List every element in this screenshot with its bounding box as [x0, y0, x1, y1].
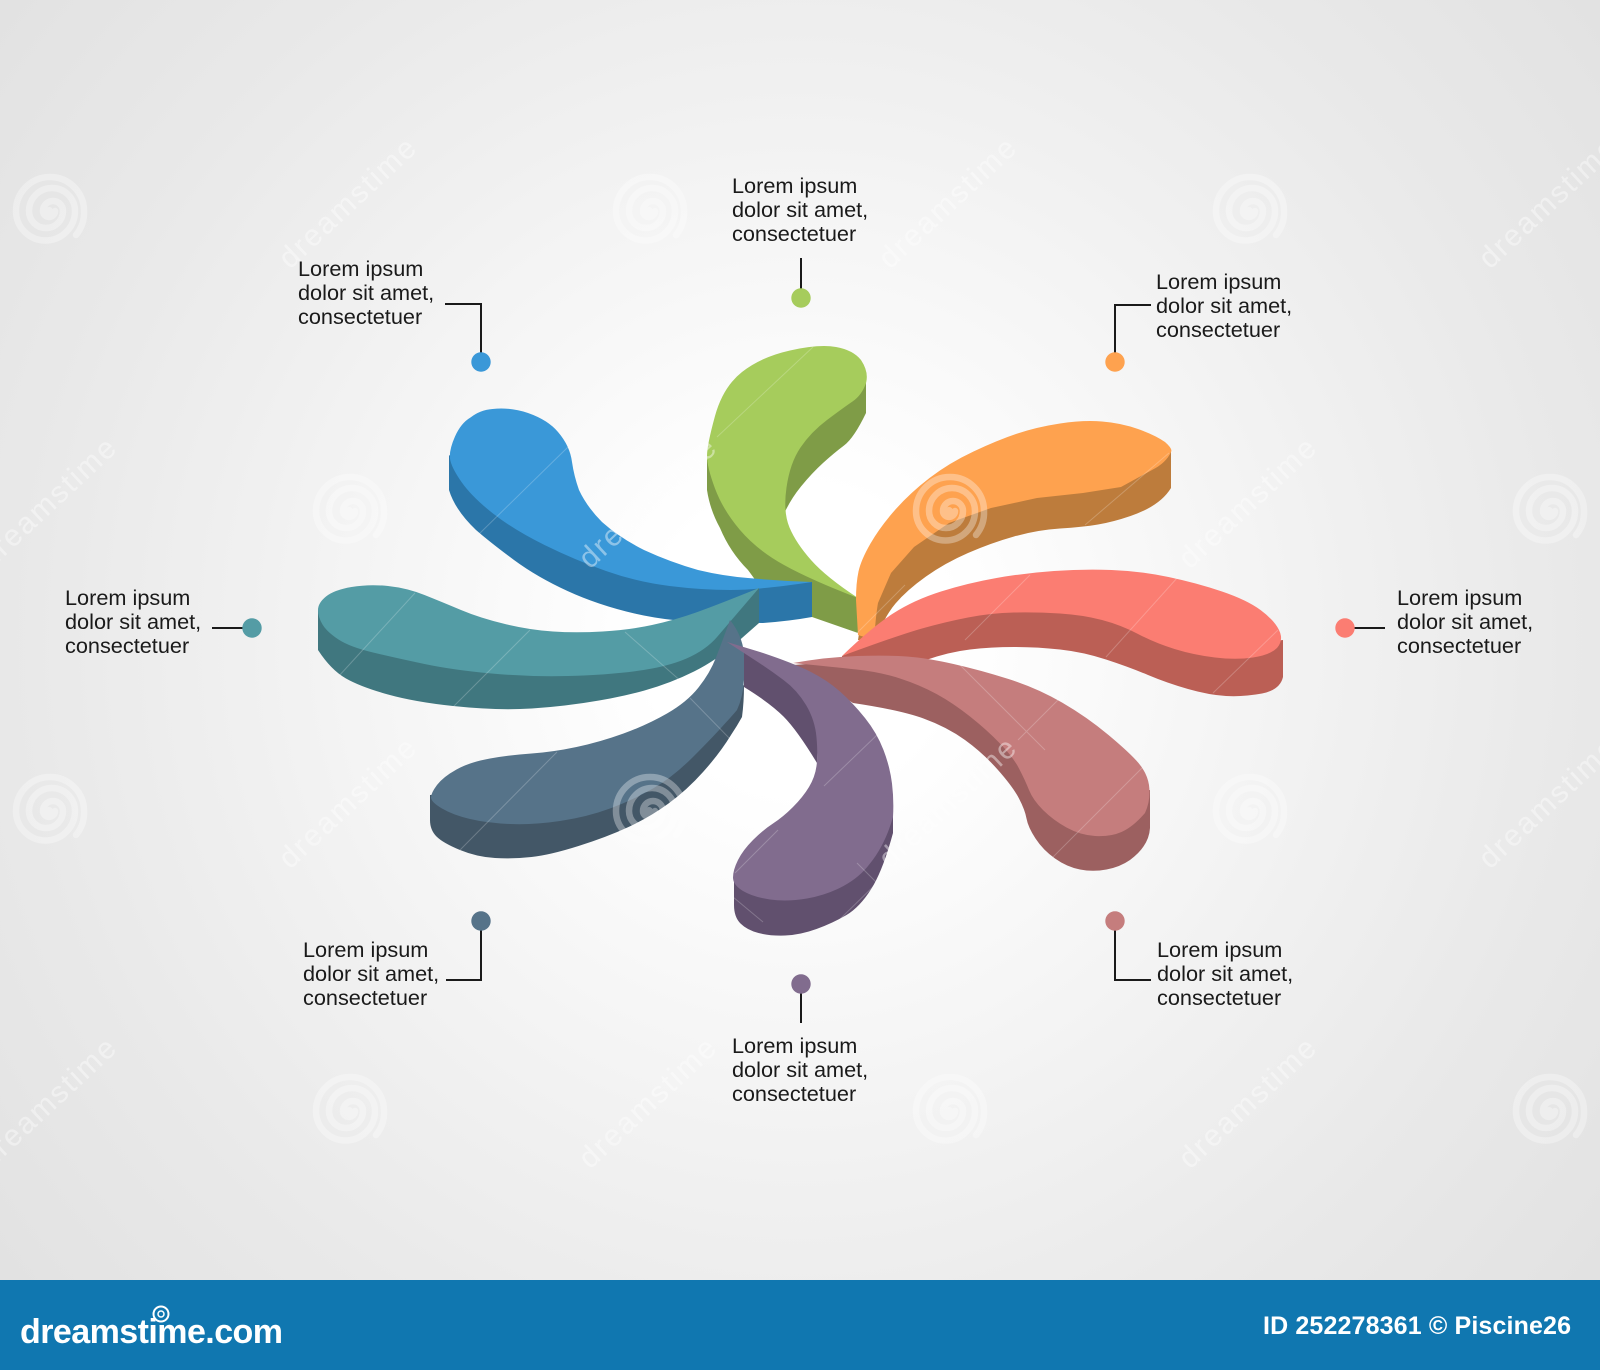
- callout: salmon: Lorem ipsum: [1397, 585, 1522, 610]
- petal: orange: [856, 421, 1171, 640]
- callout: slate: [303, 911, 491, 1010]
- footer logo: dreamstime.com: [20, 1313, 283, 1351]
- footer credit: ID 252278361 © Piscine26: [1263, 1312, 1571, 1340]
- watermark overlay: [0, 132, 1600, 1175]
- callout: green: [732, 173, 868, 308]
- petal: purple: [727, 642, 893, 936]
- callout: slate: consectetuer: [303, 985, 427, 1010]
- callout: blue: dolor sit amet,: [298, 280, 434, 305]
- callout: purple: consectetuer: [732, 1081, 856, 1106]
- watermark overlay: dreamstime: [1172, 432, 1323, 575]
- callout: rose: [1105, 911, 1293, 1010]
- callout: teal: [65, 585, 262, 658]
- petal: slate: [430, 620, 744, 858]
- callout: slate: dolor sit amet,: [303, 961, 439, 986]
- callout: teal: consectetuer: [65, 633, 189, 658]
- callout: rose: dolor sit amet,: [1157, 961, 1293, 986]
- callout: salmon: consectetuer: [1397, 633, 1521, 658]
- petal: teal: [318, 585, 759, 709]
- chart: eight petal spiral: [318, 346, 1283, 936]
- watermark overlay: dreamstime: [272, 732, 423, 875]
- callout: salmon: [1335, 585, 1533, 658]
- callout: rose: consectetuer: [1157, 985, 1281, 1010]
- watermark overlay: dreamstime: [872, 732, 1023, 875]
- callout: purple: Lorem ipsum: [732, 1033, 857, 1058]
- callout: purple: dolor sit amet,: [732, 1057, 868, 1082]
- callout: green: dolor sit amet,: [732, 197, 868, 222]
- callout: green: consectetuer: [732, 221, 856, 246]
- watermark overlay: dreamstime: [572, 432, 723, 575]
- callout: slate: Lorem ipsum: [303, 937, 428, 962]
- footer bar: [0, 1280, 1600, 1370]
- callout: rose: Lorem ipsum: [1157, 937, 1282, 962]
- petal: rose: [793, 656, 1150, 871]
- callout: teal: Lorem ipsum: [65, 585, 190, 610]
- callout: blue: Lorem ipsum: [298, 256, 423, 281]
- callout: blue: [298, 256, 491, 372]
- watermark overlay: dreamstime: [1172, 1032, 1323, 1175]
- callout: green: Lorem ipsum: [732, 173, 857, 198]
- watermark overlay: dreamstime: [572, 1032, 723, 1175]
- watermark overlay: dreamstime: [272, 132, 423, 275]
- callout: orange: dolor sit amet,: [1156, 293, 1292, 318]
- petal: blue: [449, 408, 812, 623]
- callout: orange: consectetuer: [1156, 317, 1280, 342]
- petal: salmon: [842, 570, 1283, 696]
- watermark overlay: dreamstime: [872, 132, 1023, 275]
- callout: orange: [1105, 269, 1292, 372]
- callout: orange: Lorem ipsum: [1156, 269, 1281, 294]
- callout: purple: [732, 974, 868, 1106]
- callout: blue: consectetuer: [298, 304, 422, 329]
- callout: teal: dolor sit amet,: [65, 609, 201, 634]
- callout: salmon: dolor sit amet,: [1397, 609, 1533, 634]
- petal: green: [707, 346, 867, 633]
